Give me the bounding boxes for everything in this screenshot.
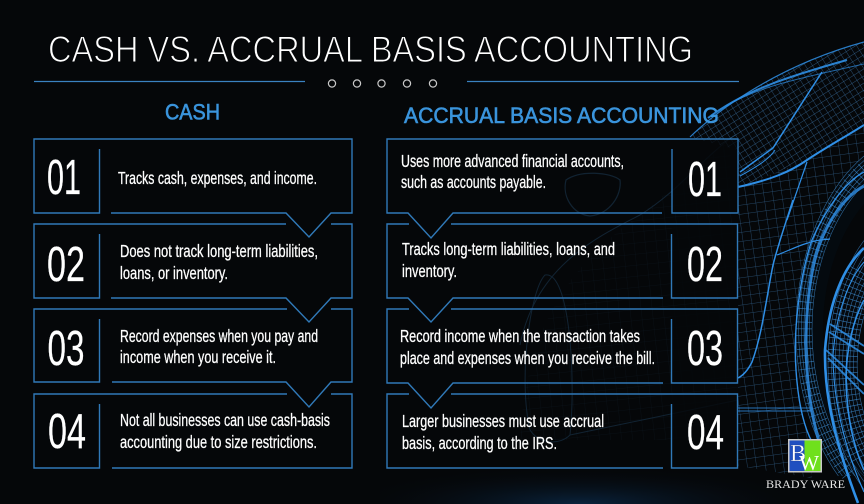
- number: 04: [48, 405, 86, 459]
- car wireframe illustration: [690, 42, 864, 503]
- text: Record income when the transaction takes: [400, 326, 640, 346]
- text: place and expenses when you receive the bill.: [400, 348, 655, 368]
- text: Larger businesses must use accrual: [402, 411, 604, 431]
- text: Tracks cash, expenses, and income.: [118, 168, 317, 188]
- text: inventory.: [402, 261, 457, 281]
- panel: cash 04: [34, 394, 352, 468]
- text: [402, 411, 604, 453]
- panel: accrual 04: [387, 394, 738, 468]
- title: CASH VS. ACCRUAL BASIS ACCOUNTING: [48, 29, 693, 70]
- bright contour lines: [690, 42, 864, 503]
- ghost car wireframe: [520, 135, 738, 442]
- text: accounting due to size restrictions.: [120, 432, 317, 452]
- logo wordmark: BRADY WARE: [766, 479, 845, 491]
- number: 02: [687, 238, 723, 292]
- number: 03: [687, 322, 723, 376]
- text: [120, 241, 318, 283]
- text: [402, 239, 615, 281]
- mesh: upper body: [690, 42, 864, 188]
- text: Tracks long-term liabilities, loans, and: [402, 239, 615, 259]
- text: [120, 410, 330, 452]
- bottom glow: [380, 440, 780, 504]
- mesh: wheel: [828, 241, 864, 489]
- text: loans, or inventory.: [120, 263, 228, 283]
- text: Not all businesses can use cash-basis: [120, 410, 330, 430]
- text: Uses more advanced financial accounts,: [401, 151, 624, 171]
- text: [401, 151, 624, 192]
- number: 01: [47, 151, 81, 205]
- number: 03: [48, 322, 84, 376]
- title divider with dots: [34, 80, 739, 87]
- panel: accrual 03: [387, 309, 738, 408]
- text: [400, 326, 655, 368]
- panel: cash 02: [34, 224, 352, 322]
- mesh: door panel: [738, 125, 864, 478]
- heading: accrual basis accounting: ACCRUAL BASIS ACCOUNTING: [404, 103, 719, 128]
- logo mark: [788, 439, 822, 475]
- logo mark: W: [799, 451, 819, 475]
- text: such as accounts payable.: [401, 172, 546, 192]
- number: 02: [47, 238, 85, 292]
- mesh: wheel arch band: [796, 156, 864, 476]
- panel: accrual 02: [387, 224, 738, 322]
- text: Does not track long-term liabilities,: [120, 241, 318, 261]
- panel: cash 03: [34, 309, 352, 407]
- text: income when you receive it.: [120, 347, 276, 367]
- logo mark: B: [790, 441, 806, 467]
- text: basis, according to the IRS.: [402, 433, 557, 453]
- number: 01: [688, 153, 722, 207]
- panel: accrual 01: [387, 139, 738, 238]
- logo: Brady Ware: [766, 439, 845, 491]
- number: 04: [687, 406, 724, 460]
- text: Record expenses when you pay and: [120, 326, 318, 346]
- text: [120, 326, 318, 367]
- heading: cash: CASH: [165, 100, 220, 124]
- panel: cash 01: [34, 139, 352, 237]
